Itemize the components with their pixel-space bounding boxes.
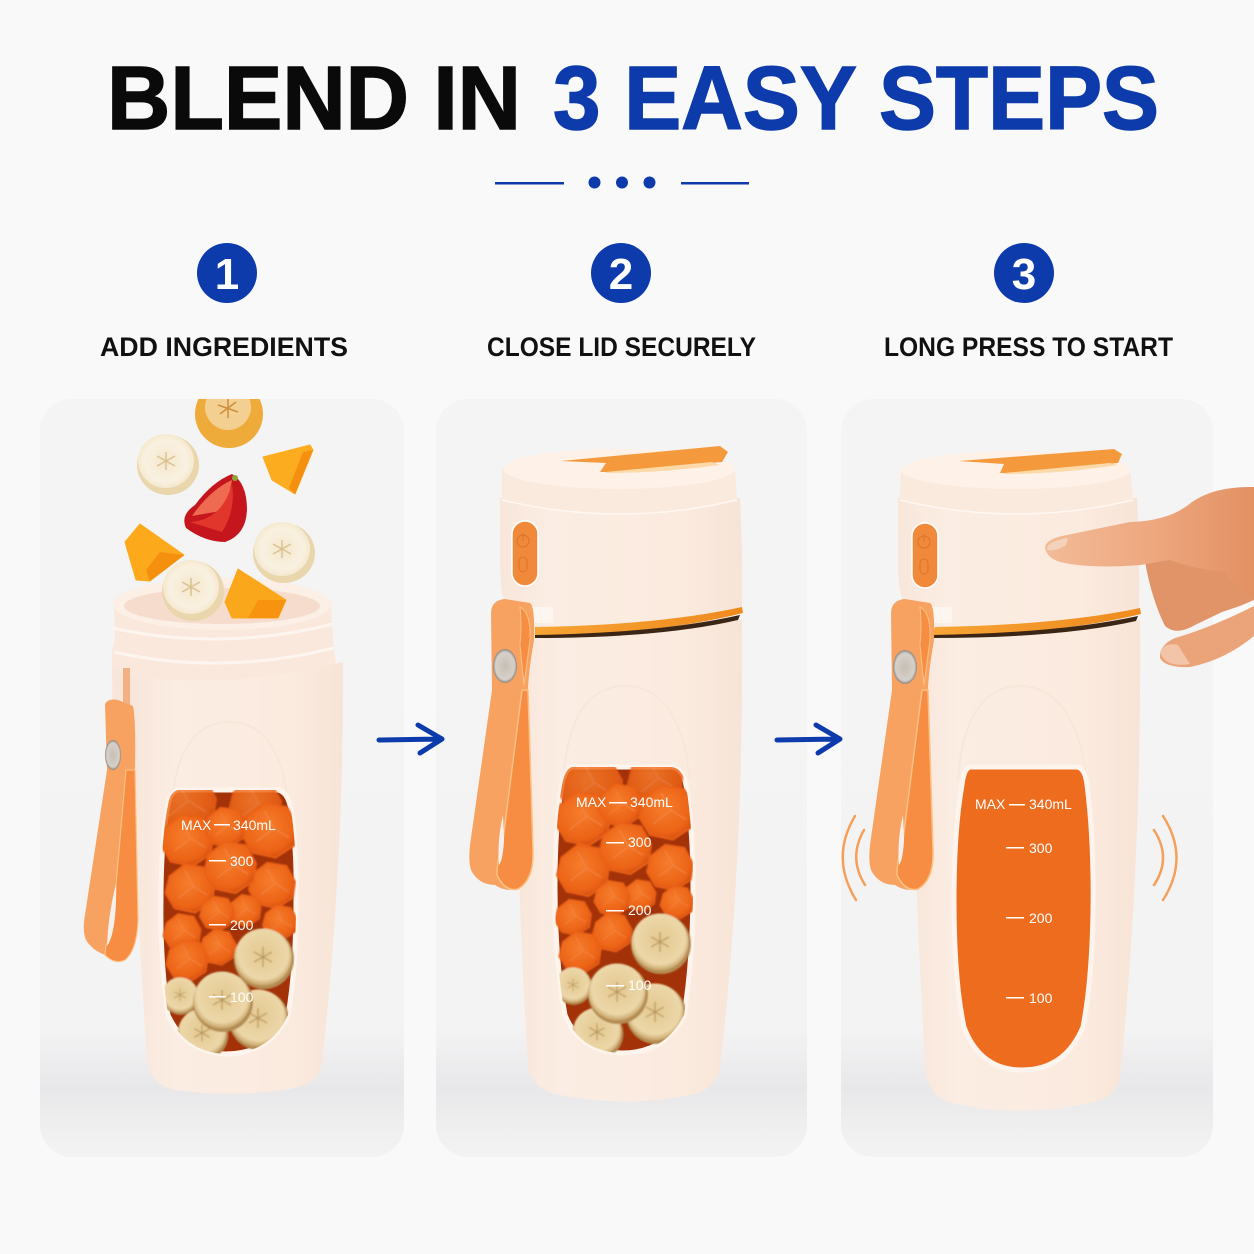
- contents: [555, 753, 695, 1059]
- panel: step 2: [436, 399, 807, 1157]
- title: 3 EASY STEPS: [553, 49, 1159, 149]
- lid tab: [959, 449, 1122, 474]
- scale marks: 300: [1029, 840, 1053, 856]
- strap: [469, 599, 534, 890]
- cup scale marks: 300: [230, 853, 254, 869]
- lid: [900, 451, 1133, 514]
- title: BLEND IN: [107, 49, 521, 149]
- cup contents: [162, 790, 296, 1054]
- strap button: [493, 649, 517, 683]
- scale marks: MAX: [576, 794, 607, 810]
- fruit: strawberry: [184, 474, 247, 542]
- cup scale marks: MAX: [181, 817, 212, 833]
- icon: hand pressing button: [1045, 487, 1254, 667]
- fruit: golden banana: [195, 399, 263, 448]
- vibration marks right: [1154, 816, 1176, 900]
- body: [912, 620, 1140, 1111]
- step 1 heading: [100, 243, 348, 362]
- panel: step 3: [841, 399, 1213, 1157]
- scale marks: 340mL: [1029, 796, 1072, 812]
- power button: [912, 523, 938, 588]
- strap button: [893, 650, 917, 684]
- scale marks: 200: [1029, 910, 1053, 926]
- lid tab: [561, 446, 728, 473]
- arrow: [379, 725, 442, 753]
- scale marks: 100: [1029, 990, 1053, 1006]
- lid: [502, 449, 737, 514]
- cup scale marks: 100: [230, 989, 254, 1005]
- scale marks: 340mL: [630, 794, 673, 810]
- scale marks: [975, 796, 1072, 1006]
- title: [107, 49, 1159, 149]
- power button: [512, 521, 538, 586]
- cup window: [161, 790, 296, 1054]
- step 2 heading: CLOSE LID SECURELY: [487, 332, 756, 362]
- fruit: banana: [137, 434, 199, 495]
- orange band: [932, 608, 1141, 638]
- cup collar: [112, 604, 336, 700]
- step 3 heading: [884, 243, 1173, 362]
- step 1 heading: ADD INGREDIENTS: [100, 332, 348, 362]
- fruit: mango: [263, 445, 313, 494]
- step 3 heading: LONG PRESS TO START: [884, 332, 1173, 362]
- step 2 heading: 2: [609, 250, 633, 299]
- falling fruit: [125, 380, 315, 621]
- scale marks: 100: [628, 977, 652, 993]
- cup strap button: [105, 740, 121, 770]
- upper unit: [898, 498, 1139, 628]
- scale marks: 300: [628, 834, 652, 850]
- fruit: banana: [162, 560, 224, 621]
- window: [555, 767, 693, 1053]
- cup body: [133, 662, 343, 1094]
- body: [515, 620, 742, 1102]
- cup strap: [84, 700, 138, 962]
- scale marks: 200: [628, 902, 652, 918]
- cup scale marks: 200: [230, 917, 254, 933]
- strap: [869, 599, 934, 890]
- cup scale marks: 340mL: [233, 817, 276, 833]
- blender 1: open cup: [84, 578, 343, 1094]
- blender 2: closed: [469, 446, 743, 1102]
- blender 3: blending: [869, 449, 1141, 1111]
- strap clip: [922, 607, 952, 623]
- step 1 heading: 1: [215, 250, 239, 299]
- step 3 heading: 3: [1012, 250, 1036, 299]
- step 2 heading: [487, 243, 756, 362]
- fruit: banana: [253, 522, 315, 583]
- title divider: [495, 176, 749, 188]
- arrow: [777, 725, 840, 753]
- scale marks: [576, 794, 673, 993]
- vibration marks left: [843, 816, 865, 900]
- fruit: mango: [125, 524, 184, 581]
- strap clip: [524, 607, 553, 623]
- panel: step 1: [40, 399, 404, 1157]
- cup scale marks: [181, 817, 276, 1005]
- window with smoothie: [954, 767, 1093, 1070]
- fruit: mango: [225, 569, 286, 618]
- upper unit: [500, 498, 742, 628]
- orange band: [535, 607, 743, 638]
- scale marks: MAX: [975, 796, 1006, 812]
